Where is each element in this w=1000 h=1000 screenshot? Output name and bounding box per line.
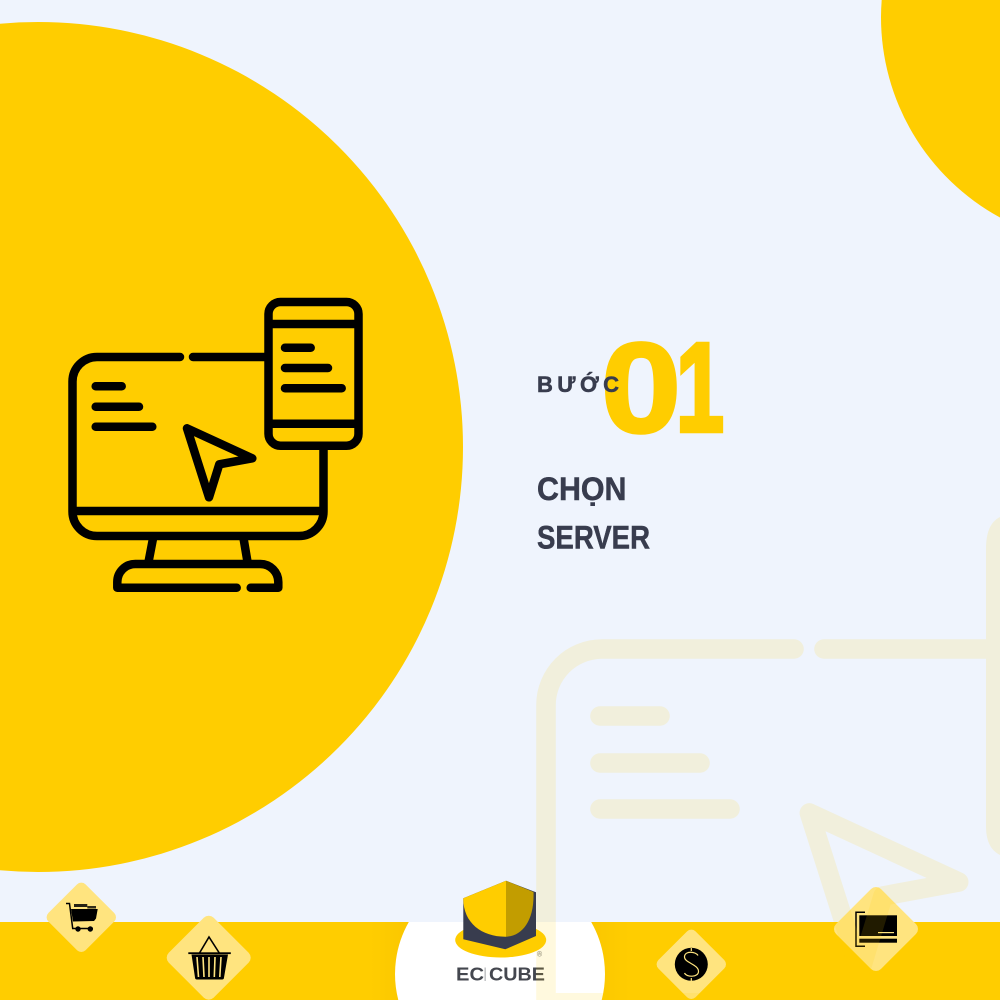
badge: basket (167, 916, 251, 1000)
heading: choose server: SERVER (537, 520, 650, 556)
step number 01: 1 (676, 317, 724, 458)
step number 01 (601, 317, 724, 460)
large yellow circle (0, 22, 463, 872)
main icon: monitor with phone and cursor (72, 302, 358, 588)
phone (268, 302, 358, 446)
monitor stand (148, 537, 248, 563)
badge: credit card (834, 887, 918, 971)
logo: EC-CUBE (455, 881, 546, 985)
badge: dollar coin (657, 930, 726, 999)
monitor frame (72, 357, 324, 536)
step number 01: 0 (601, 317, 681, 460)
bottom yellow bar (0, 922, 1000, 1000)
step label: BƯỚC (537, 372, 619, 397)
monitor text lines (96, 386, 152, 427)
cursor arrow (187, 428, 252, 497)
badge: shopping cart (47, 883, 116, 952)
phone text lines (285, 348, 342, 388)
monitor base (117, 564, 278, 588)
top right yellow circle (881, 0, 1000, 218)
white logo circle (370, 922, 630, 1000)
logo: EC-CUBE: EC (456, 965, 484, 985)
logo: EC-CUBE: CUBE (489, 965, 545, 985)
watermark: faint monitor icon (536, 517, 1000, 1000)
logo: EC-CUBE: ® (537, 950, 543, 958)
heading: choose server (537, 471, 650, 556)
heading: choose server: CHỌN (537, 471, 626, 507)
